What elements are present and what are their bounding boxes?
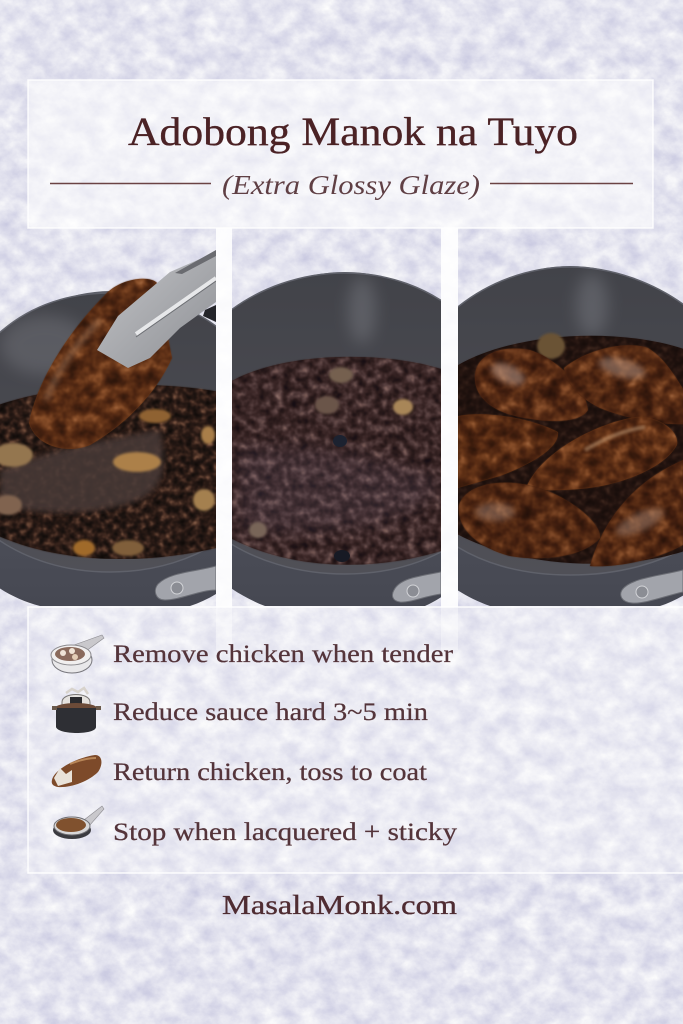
icon: chicken piece — [52, 755, 101, 787]
icon: pan with sauce — [53, 806, 104, 839]
icon: bowl with spoon — [51, 635, 104, 673]
chicken: bottom right — [590, 460, 683, 566]
glazed chicken pieces — [458, 345, 683, 566]
step text: Return chicken, toss to coat — [113, 759, 427, 786]
step 4 — [53, 806, 458, 846]
vertical white dividers between photos — [216, 228, 458, 650]
chicken: top left — [475, 348, 588, 421]
heading: Adobong Manok na Tuyo — [128, 109, 578, 154]
sauce 2 — [225, 357, 450, 565]
photo 3: glazed chicken pieces in pan — [458, 266, 683, 606]
step text: Stop when lacquered + sticky — [113, 819, 458, 846]
step 3 — [52, 755, 427, 787]
subtitle with rules: (Extra Glossy Glaze) — [222, 170, 480, 200]
pan 1 body — [0, 291, 216, 606]
sauce 3 — [450, 333, 683, 564]
panel: title — [28, 80, 653, 228]
sauce 1 — [0, 385, 220, 559]
panel: steps — [28, 607, 683, 873]
step text: Reduce sauce hard 3~5 min — [113, 699, 429, 726]
lifted chicken 1 — [29, 279, 172, 449]
step text: Remove chicken when tender — [113, 641, 454, 668]
photo 2: reducing sauce in pan — [232, 272, 441, 606]
pan handle 1 — [155, 566, 216, 600]
photo 1: chicken lifted with tongs from pan — [0, 250, 216, 606]
icon: pot with lid — [52, 688, 101, 733]
step 2 — [52, 688, 429, 733]
step 1 — [51, 635, 454, 673]
pan 3 body — [458, 266, 683, 606]
pan 2 body — [232, 272, 441, 606]
chicken: middle left — [458, 414, 558, 488]
chicken: middle centre — [527, 417, 677, 490]
chicken: bottom left — [459, 483, 600, 558]
pan handle 2 — [392, 572, 441, 602]
pan handle 3 — [621, 570, 683, 603]
footer: website: MasalaMonk.com — [222, 890, 457, 920]
tongs — [97, 250, 216, 368]
chicken: top right — [564, 345, 683, 424]
